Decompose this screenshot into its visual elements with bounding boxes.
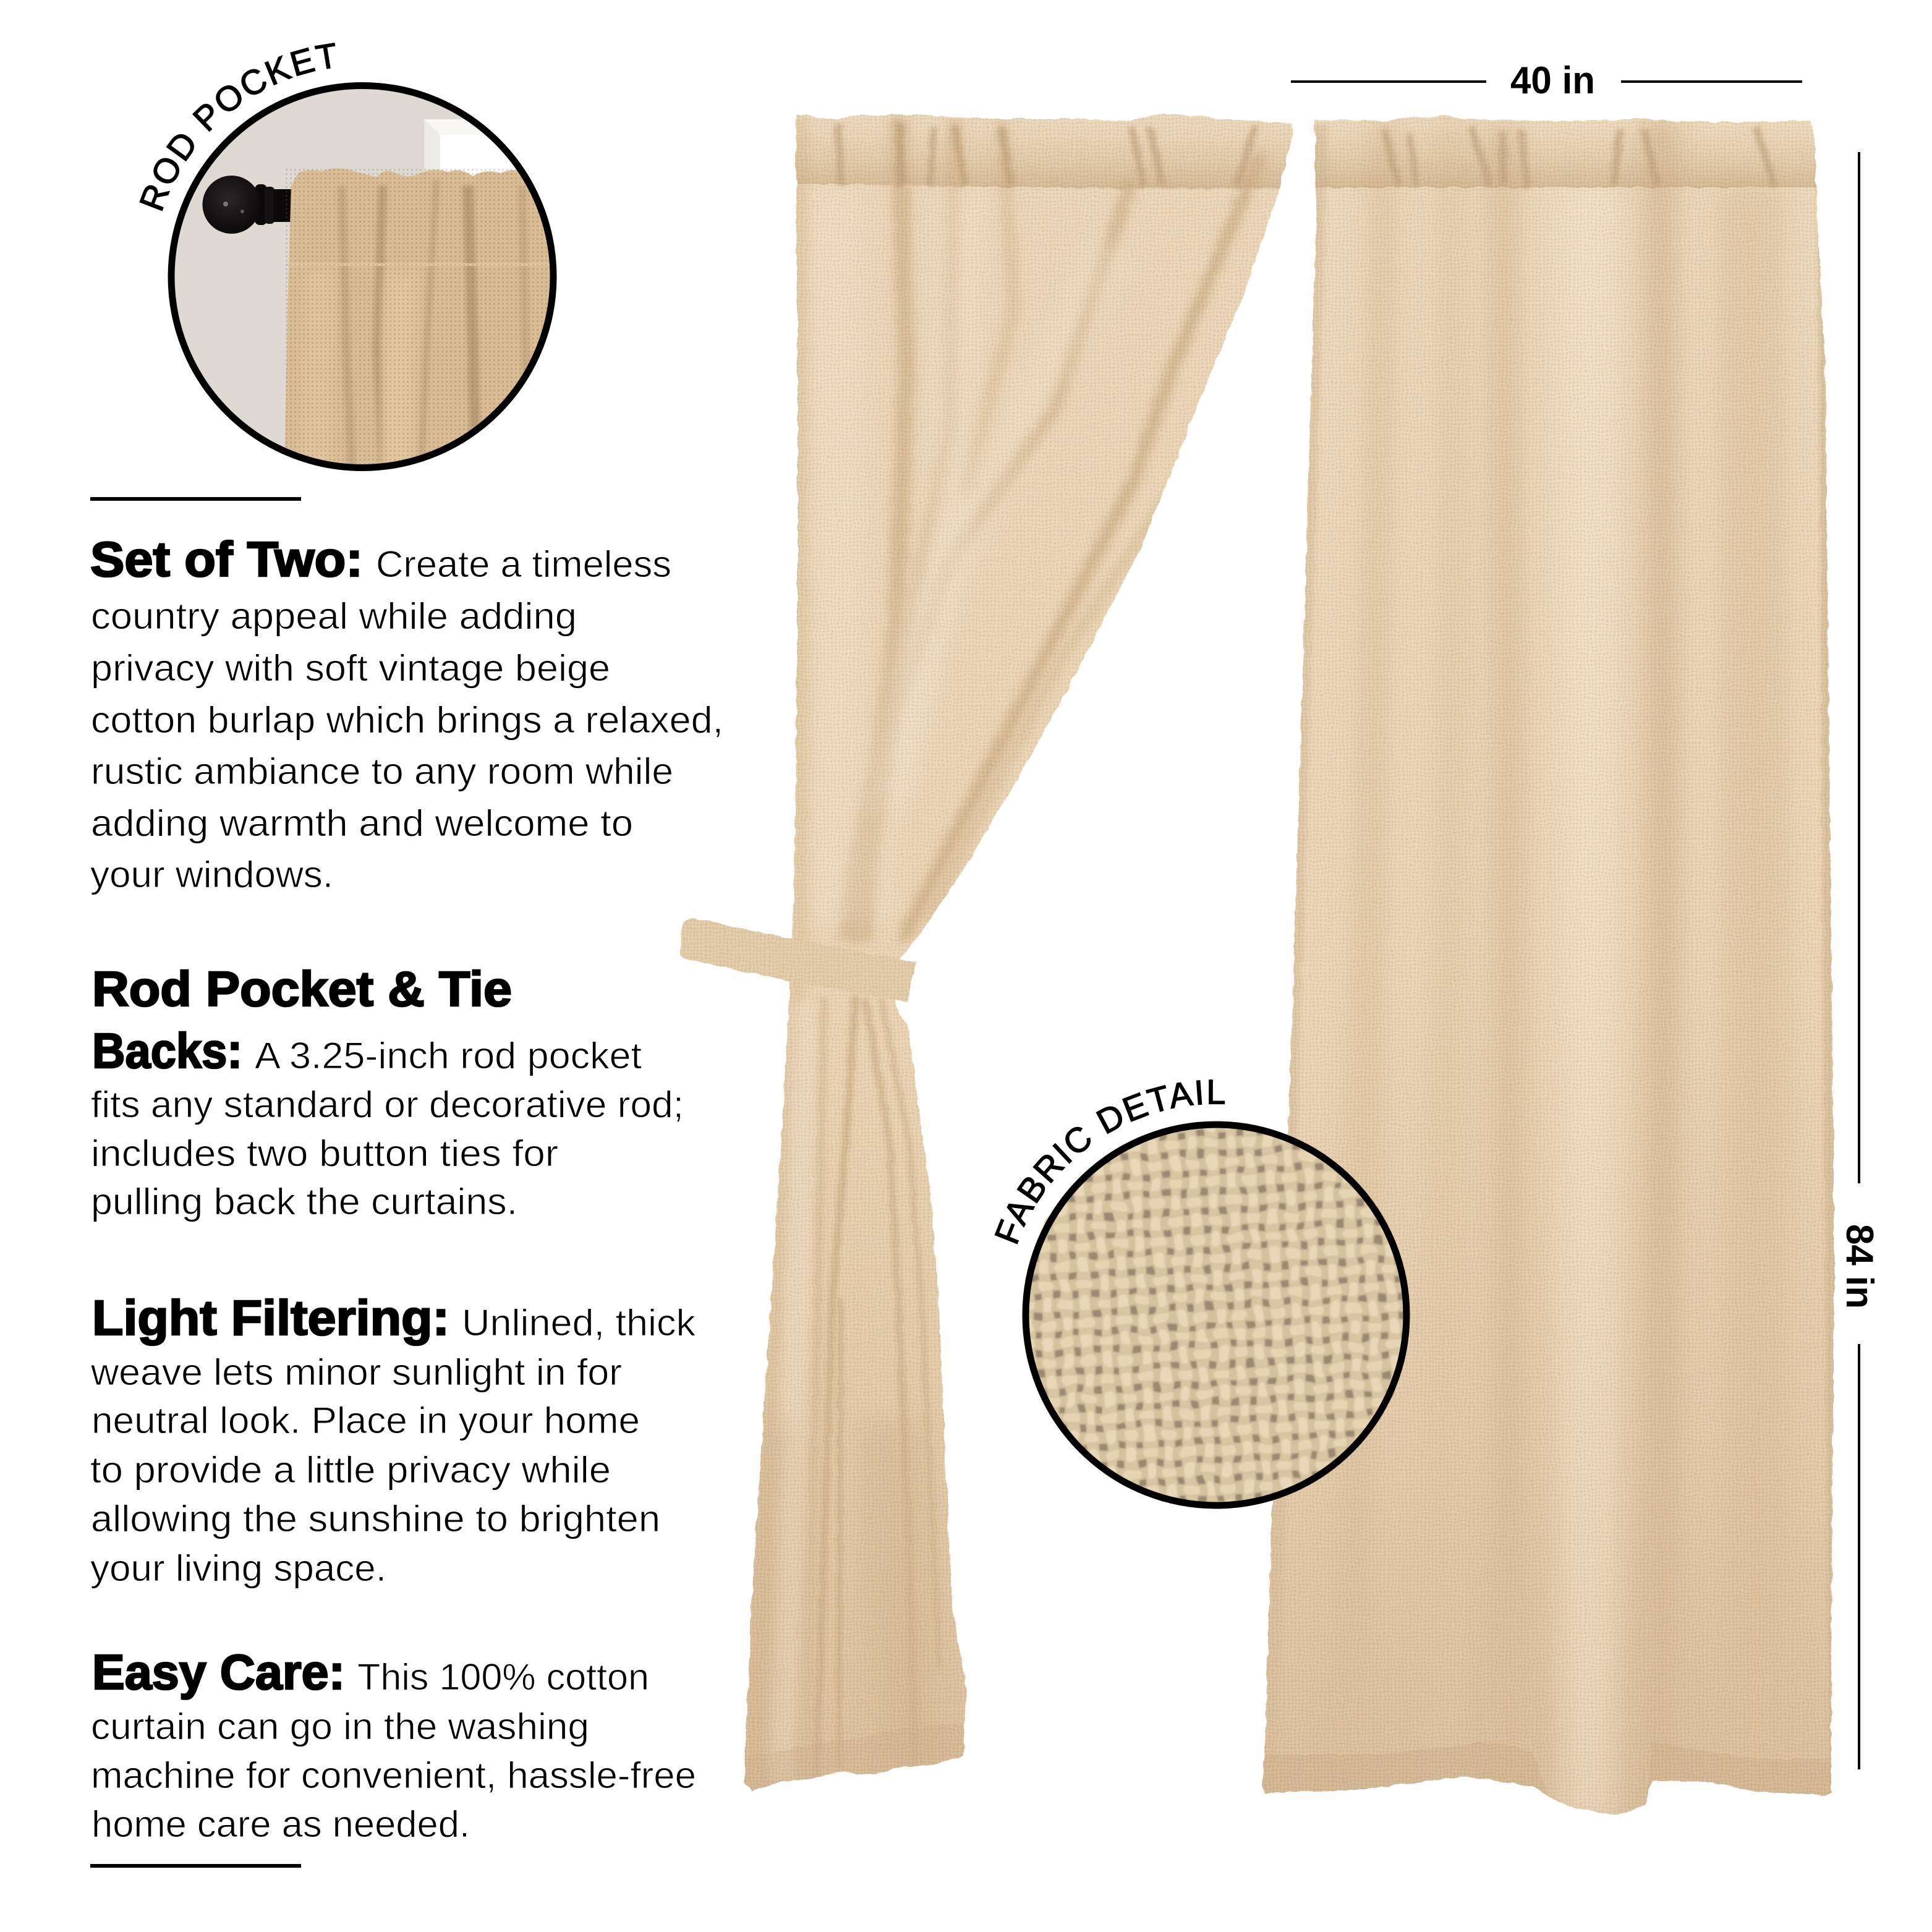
text block: light filtering: Light Filtering: (92, 1290, 449, 1345)
text block: rod pocket and tie backs (91, 961, 684, 1222)
tie-back band (680, 918, 916, 1002)
right curtain folds (1267, 117, 1839, 1824)
text block: easy care: Easy Care: (92, 1645, 345, 1700)
left curtain bottom hem (739, 1722, 971, 1799)
right curtain rod pocket band (1314, 143, 1817, 189)
text block: set of two: Set of Two: (90, 532, 363, 587)
width dimension: 40 in: 40 in (1510, 59, 1595, 102)
text block: easy care: curtain can go in the washing (91, 1706, 589, 1747)
left curtain panel (680, 105, 1298, 1805)
label: fabric detail curved: FABRIC DETAIL (994, 1079, 1225, 1245)
text block: rod pocket and tie backs: includes two button ties for (91, 1133, 558, 1174)
curtain in photo (285, 168, 563, 482)
text block: light filtering (90, 1290, 696, 1589)
text block: set of two: adding warmth and welcome to (91, 802, 633, 844)
text block: light filtering: weave lets minor sunlight in for (90, 1351, 622, 1393)
text block: set of two: Create a timeless (376, 543, 671, 585)
text block: set of two: country appeal while adding (91, 595, 577, 637)
fabric detail ring (1026, 1125, 1406, 1505)
text block: easy care: machine for convenient, hassle-free (91, 1755, 696, 1796)
text block: set of two: your windows. (90, 854, 333, 895)
label: rod pocket curved: ROD POCKET (139, 43, 335, 211)
text block: light filtering: your living space. (90, 1547, 386, 1589)
text block: easy care: home care as needed. (91, 1803, 470, 1845)
window trim (424, 119, 569, 185)
finial (203, 176, 294, 234)
text block: set of two: cotton burlap which brings a relaxed, (91, 699, 723, 741)
left curtain rod pocket band (791, 127, 1295, 189)
text block: rod pocket and tie backs: Rod Pocket & Tie (92, 961, 512, 1016)
text block: easy care: This 100% cotton (357, 1656, 649, 1698)
bottom rule (90, 1864, 301, 1868)
text block: rod pocket and tie backs: fits any standard or decorative rod; (91, 1084, 684, 1125)
text block: light filtering: Unlined, thick (462, 1302, 696, 1343)
text block: rod pocket and tie backs: Backs: (92, 1023, 242, 1078)
text block: easy care (91, 1645, 696, 1845)
text block: set of two: rustic ambiance to any room while (91, 751, 673, 792)
text block: light filtering: allowing the sunshine to brighten (91, 1498, 660, 1539)
height dimension: 84 in: 84 in (1838, 1224, 1881, 1309)
wall (167, 80, 563, 476)
right curtain bottom hem (1262, 1742, 1831, 1800)
text block: rod pocket and tie backs: A 3.25-inch rod pocket (255, 1035, 642, 1076)
text block: rod pocket and tie backs: pulling back the curtains. (91, 1181, 517, 1222)
rod pocket ring (171, 85, 553, 467)
left curtain folds (751, 117, 1261, 1793)
fabric detail circle (1024, 1123, 1408, 1507)
text block: set of two: privacy with soft vintage beige (91, 647, 610, 689)
top rule (90, 497, 301, 501)
text block: light filtering: neutral look. Place in your home (91, 1400, 640, 1441)
height dimension: 84 in (1838, 152, 1881, 1769)
text block: set of two (90, 532, 723, 895)
right curtain panel (1261, 111, 1842, 1830)
rod pocket circle photo (167, 80, 569, 485)
width dimension: 40 in (1291, 59, 1802, 102)
label: fabric detail curved (994, 1079, 1347, 1274)
text block: light filtering: to provide a little privacy while (90, 1449, 611, 1491)
